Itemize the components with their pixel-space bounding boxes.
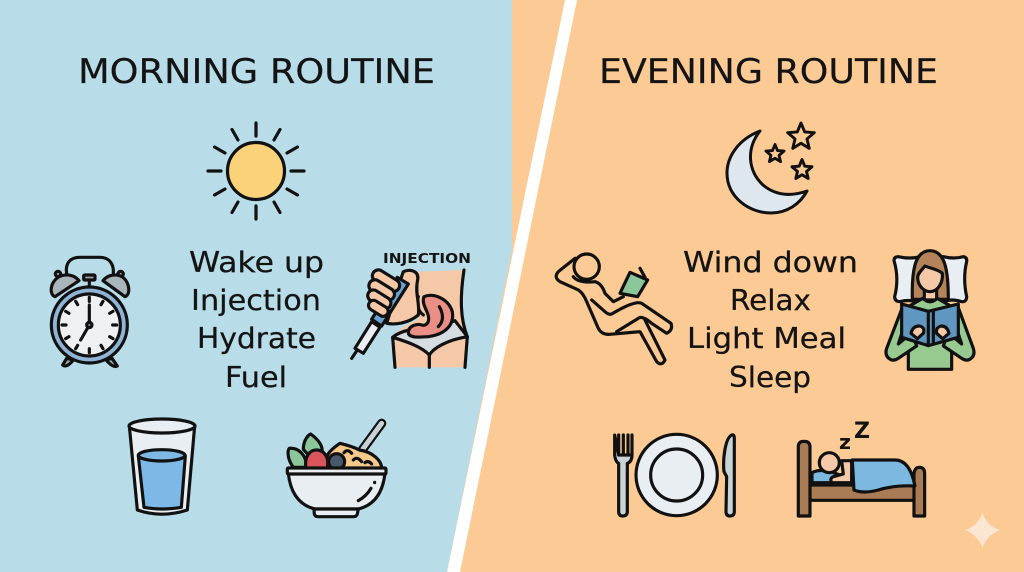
text block: morning steps: Hydrate (197, 322, 316, 355)
icon: moon and stars (727, 123, 814, 213)
text block: evening steps: Light Meal (687, 322, 846, 355)
icon text: large Z: Z (854, 419, 870, 444)
icon: person relaxing with a book (556, 254, 672, 364)
icon: woman reading in bed (886, 251, 974, 369)
text block: morning steps: Fuel (225, 361, 287, 394)
text block: morning steps: Wake up (189, 246, 324, 279)
icon: glass of water (129, 419, 195, 514)
text block: evening steps: Wind down (683, 246, 858, 279)
morning background (0, 0, 512, 572)
hand holding injection pen (352, 268, 419, 358)
panel: morning routine (0, 0, 512, 572)
heading: morning routine: MORNING ROUTINE (78, 52, 435, 92)
icon: sun (208, 123, 304, 219)
icon: person sleeping in bed (798, 441, 925, 516)
text block: evening steps: Relax (730, 284, 811, 317)
icon text: small z: z (839, 430, 851, 454)
text block: morning steps: Injection (191, 284, 321, 317)
label: injection: INJECTION (383, 251, 471, 267)
heading: evening routine: EVENING ROUTINE (599, 52, 938, 92)
icon: plate with fork and knife (615, 434, 734, 516)
text block: evening steps (683, 246, 858, 394)
diagonal white divider (447, 0, 577, 572)
icon: sparkle watermark (965, 513, 1000, 548)
icon: bowl of oatmeal with fruit (287, 423, 386, 517)
icon: alarm clock (51, 257, 129, 366)
icon: injection into abdomen (352, 251, 471, 367)
torso and stomach (392, 270, 467, 367)
text block: evening steps: Sleep (729, 361, 811, 394)
text block: morning steps (189, 246, 324, 394)
